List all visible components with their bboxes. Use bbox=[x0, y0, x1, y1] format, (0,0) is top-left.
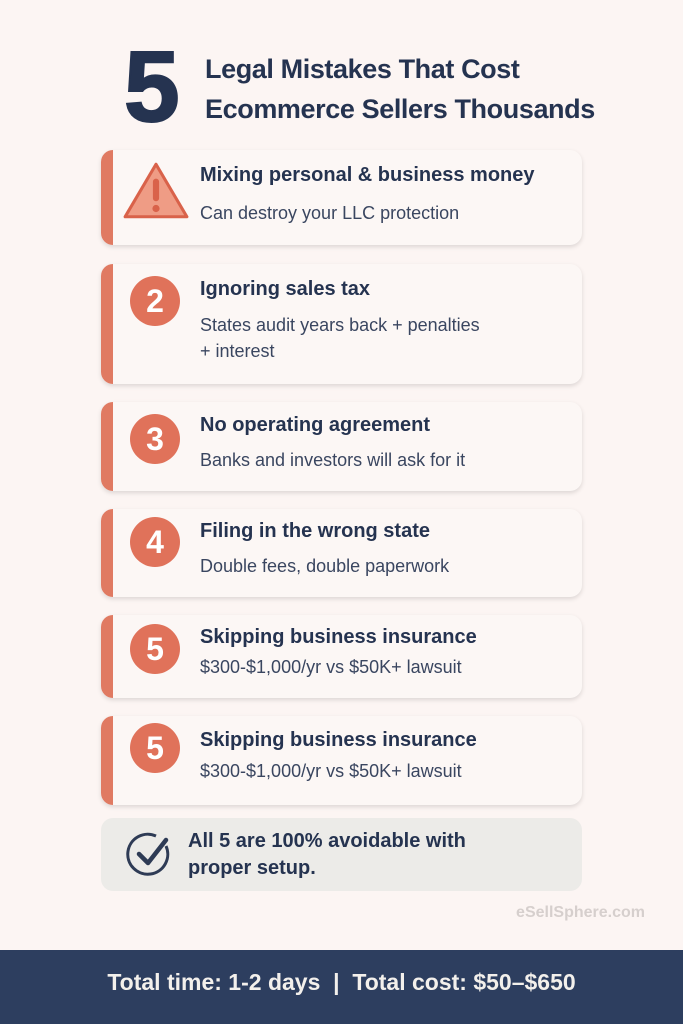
card 2 bbox=[101, 264, 582, 384]
card 4 text: Filing in the wrong state bbox=[200, 520, 430, 542]
text: $300-$1,000/yr vs $50K+ lawsuit bbox=[200, 657, 462, 677]
footer bar: Total time: 1-2 days | Total cost: $50–$650 bbox=[107, 969, 576, 995]
card 6 text: Skipping business insurance bbox=[200, 729, 477, 751]
icon: check bbox=[126, 832, 170, 876]
title bbox=[124, 31, 595, 143]
card 6 bbox=[101, 716, 582, 805]
circle 3: 3 bbox=[146, 421, 164, 457]
title text bbox=[205, 54, 595, 124]
card 2 text: Ignoring sales tax bbox=[200, 278, 370, 300]
circle 3 bbox=[130, 414, 180, 464]
card 1 bbox=[101, 150, 582, 245]
card 3 text: No operating agreement bbox=[200, 414, 430, 436]
title text: Legal Mistakes That Cost bbox=[205, 54, 519, 84]
card 5 text: Skipping business insurance bbox=[200, 626, 477, 648]
callout text bbox=[188, 830, 466, 879]
circle 2 bbox=[130, 276, 180, 326]
text: States audit years back + penalties bbox=[200, 315, 480, 335]
callout text: proper setup. bbox=[188, 857, 316, 879]
circle 4 bbox=[130, 517, 180, 567]
big number 5: 5 bbox=[124, 31, 180, 143]
circle 6: 5 bbox=[146, 730, 164, 766]
circle 5: 5 bbox=[146, 631, 164, 667]
circle 5 bbox=[130, 624, 180, 674]
card 5 bbox=[101, 615, 582, 698]
text: Banks and investors will ask for it bbox=[200, 450, 465, 470]
callout bbox=[101, 818, 582, 891]
text: + interest bbox=[200, 341, 275, 361]
text: $300-$1,000/yr vs $50K+ lawsuit bbox=[200, 761, 462, 781]
circle 6 bbox=[130, 723, 180, 773]
footer bar bbox=[0, 950, 683, 1024]
card 1 text: Mixing personal & business money bbox=[200, 164, 535, 186]
text: Double fees, double paperwork bbox=[200, 556, 449, 576]
card 4 bbox=[101, 509, 582, 597]
card 3 bbox=[101, 402, 582, 491]
watermark: eSellSphere.com bbox=[516, 904, 645, 921]
icon: warning bbox=[124, 162, 188, 218]
circle 4: 4 bbox=[146, 524, 164, 560]
text: Can destroy your LLC protection bbox=[200, 203, 459, 223]
title text: Ecommerce Sellers Thousands bbox=[205, 94, 595, 124]
callout text: All 5 are 100% avoidable with bbox=[188, 830, 466, 852]
circle 2: 2 bbox=[146, 283, 164, 319]
